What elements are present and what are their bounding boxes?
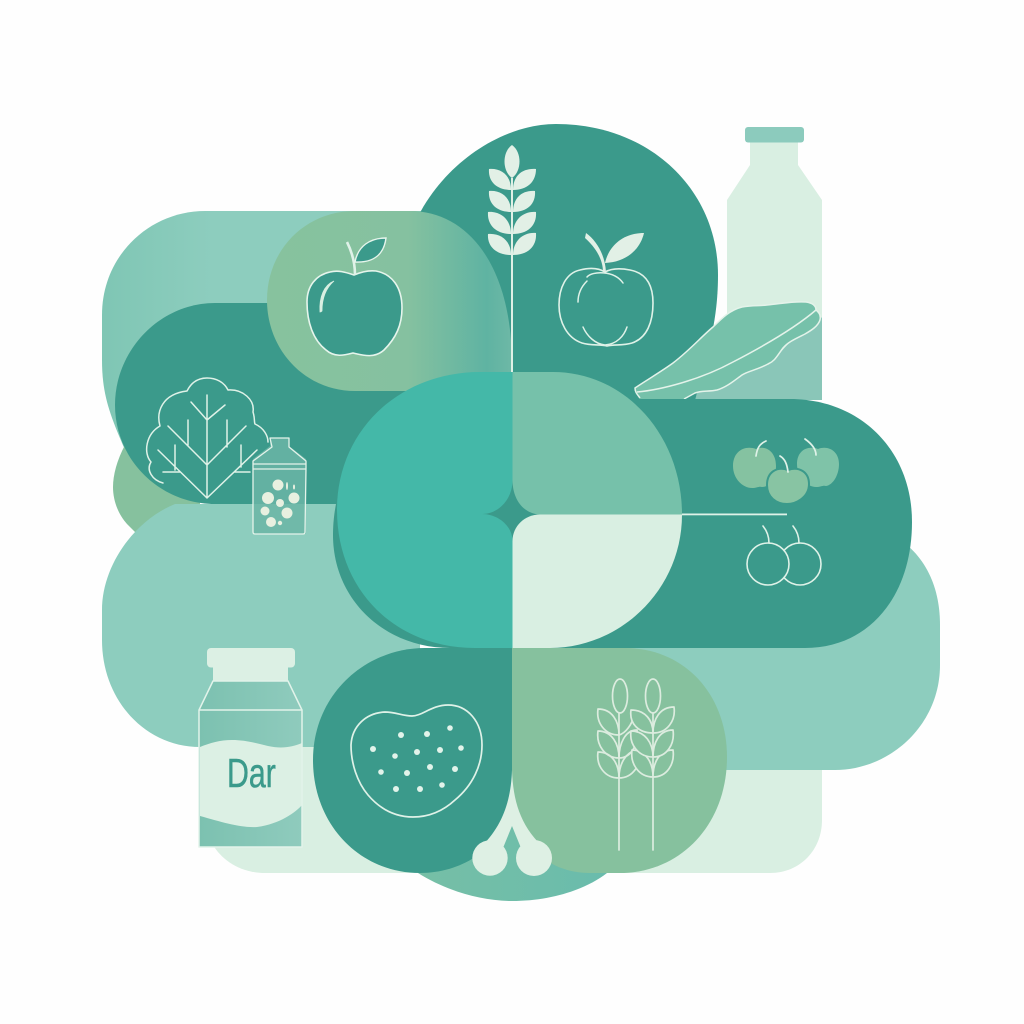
cherry left <box>747 543 789 585</box>
jar contents <box>260 480 300 527</box>
panel: right dark pill <box>500 399 912 648</box>
panel: small green back shape <box>113 445 200 534</box>
jar label <box>200 740 302 827</box>
apple highlight <box>320 281 334 312</box>
bottle lower tint <box>680 317 822 400</box>
cherry right <box>516 840 552 876</box>
apple body <box>307 271 402 356</box>
jar body <box>253 438 306 534</box>
icon: outlined apple with leaf <box>559 233 653 346</box>
panel: lower left light pill <box>102 504 520 747</box>
bottle body <box>727 142 822 400</box>
jar outline <box>253 438 306 534</box>
bean seeds <box>370 725 464 792</box>
wheat right <box>631 679 674 850</box>
icon: small jar <box>253 438 306 534</box>
bean outline <box>351 705 482 817</box>
apple left <box>733 448 776 488</box>
apple stem <box>347 242 355 275</box>
panel: top dark circle <box>405 124 718 420</box>
cherry right <box>779 543 821 585</box>
icon: wheat stalk solid <box>488 145 536 373</box>
jar tinted glass <box>199 681 302 847</box>
bottle: milk bottle <box>680 127 822 400</box>
jar cap <box>207 648 295 668</box>
jar neck <box>213 666 288 681</box>
panel: central lower right quadrant <box>512 514 682 648</box>
bowl body <box>635 302 820 399</box>
panel: upper left light pill <box>102 211 430 450</box>
cherry stems <box>482 770 542 848</box>
panel: dark left pill <box>115 303 450 504</box>
icon: three green apples <box>733 439 839 504</box>
icon: lettuce <box>147 378 268 498</box>
icon: large Dar jar <box>199 648 302 847</box>
panel: central teal shadow <box>333 470 512 648</box>
panel: apple green pill <box>267 211 511 391</box>
wheat top grain <box>504 145 520 178</box>
icon: outlined wheat pair <box>598 679 674 850</box>
panel: bottom teal bowl shape <box>418 790 607 901</box>
jar outline <box>199 681 302 847</box>
apple outline <box>559 268 653 346</box>
panel: central upper right quadrant <box>512 372 682 514</box>
bowl outline <box>635 302 820 399</box>
apple right <box>797 448 839 487</box>
icon: filled apple <box>307 238 402 356</box>
icon: pale cherries <box>472 770 552 876</box>
apple leaf <box>605 233 644 263</box>
icon: seed bean <box>351 705 482 817</box>
cherry stems <box>763 526 799 543</box>
apple front <box>767 469 809 504</box>
panel: pale bottom base <box>213 740 822 873</box>
icon: outlined cherries <box>747 526 821 585</box>
apple stem <box>585 233 606 272</box>
apple leaf <box>355 238 386 262</box>
cherry left <box>472 840 508 876</box>
connector line <box>682 514 787 515</box>
panel: bottom green pill <box>512 648 727 873</box>
panel: right light pill <box>500 520 940 770</box>
jar label text: Dar <box>227 749 276 796</box>
panel: central teal half <box>337 372 512 648</box>
lettuce veins <box>158 395 257 498</box>
apple stems <box>756 439 816 472</box>
apple inner lines <box>578 273 627 345</box>
panel: bottom dark pill <box>313 648 512 873</box>
wheat left <box>598 679 640 850</box>
icon: bowl <box>635 302 820 399</box>
lettuce outline <box>147 378 268 483</box>
wheat stem <box>511 178 513 373</box>
bottle cap <box>745 127 804 142</box>
